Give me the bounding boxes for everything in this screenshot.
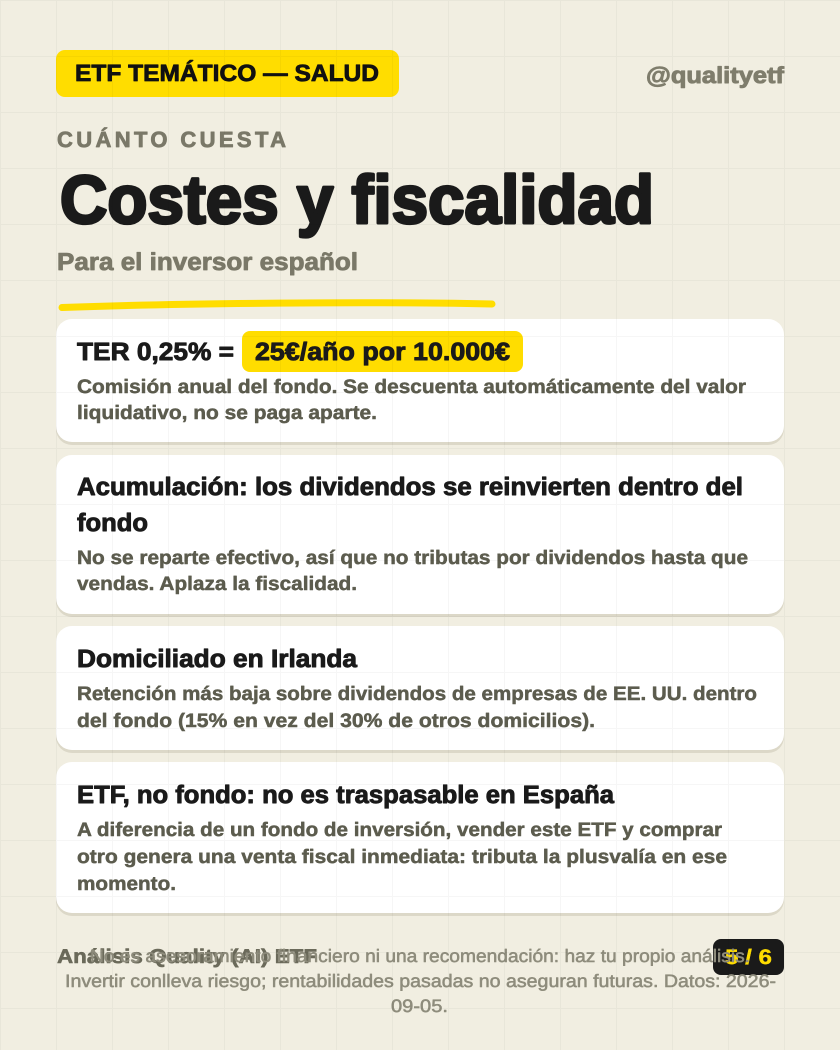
- card: Domiciliado: [56, 626, 784, 753]
- card text: TER: liquidativo, no se paga aparte.: [77, 402, 377, 424]
- page indicator: [713, 939, 784, 975]
- card text: ETF no fondo: otro genera una venta fiscal inmediata: tributa la plusvalía en ese: [77, 846, 727, 868]
- highlight pill: [242, 331, 523, 372]
- card: TER: [56, 319, 784, 445]
- card heading: Acumulación: [77, 473, 743, 537]
- disclaimer: Invertir conlleva riesgo; rentabilidades pasadas no aseguran futuras. Datos: 2026-: [65, 971, 776, 991]
- page indicator: 5 / 6: [725, 946, 772, 969]
- footer brand: Análisis Quality (AI) ETF: [57, 946, 317, 968]
- card text: Acumulación: No se reparte efectivo, así que no tributas por dividendos hasta que: [77, 547, 748, 569]
- disclaimer: 09-05.: [391, 996, 448, 1016]
- card text: TER: [77, 376, 746, 424]
- card text: Domiciliado: [77, 683, 757, 732]
- card heading: Acumulación: fondo: [77, 509, 148, 537]
- card heading: Domiciliado: Domiciliado en Irlanda: [77, 645, 358, 673]
- subtitle: Para el inversor español: [57, 249, 358, 276]
- card text: Domiciliado: del fondo (15% en vez del 30% de otros domicilios).: [77, 710, 595, 732]
- card heading: TER: TER 0,25% =: [77, 338, 234, 366]
- card text: ETF no fondo: [77, 819, 727, 895]
- tag badge: [56, 50, 399, 97]
- card: ETF no fondo: [56, 762, 784, 916]
- card text: TER: Comisión anual del fondo. Se descuenta automáticamente del valor: [77, 376, 746, 398]
- tag badge: ETF TEMÁTICO — SALUD: [75, 60, 379, 86]
- title: Costes y fiscalidad: [60, 162, 654, 238]
- card heading: Acumulación: Acumulación: los dividendos se reinvierten dentro del: [77, 473, 743, 501]
- card text: ETF no fondo: A diferencia de un fondo de inversión, vender este ETF y comprar: [77, 819, 722, 841]
- card text: Acumulación: [77, 547, 748, 595]
- card text: ETF no fondo: momento.: [77, 873, 176, 895]
- highlight pill: 25€/año por 10.000€: [255, 338, 510, 366]
- yellow underline: [62, 303, 492, 308]
- card heading: ETF no fondo: ETF, no fondo: no es traspasable en España: [77, 781, 615, 809]
- handle: @qualityetf: [646, 62, 784, 88]
- card text: Acumulación: vendas. Aplaza la fiscalidad.: [77, 573, 357, 595]
- card: Acumulación: [56, 455, 784, 617]
- disclaimer: [65, 946, 776, 1016]
- eyebrow: CUÁNTO CUESTA: [57, 127, 286, 152]
- disclaimer: No es asesoramiento financiero ni una recomendación: haz tu propio análisis.: [90, 946, 750, 966]
- card text: Domiciliado: Retención más baja sobre dividendos de empresas de EE. UU. dentro: [77, 683, 757, 705]
